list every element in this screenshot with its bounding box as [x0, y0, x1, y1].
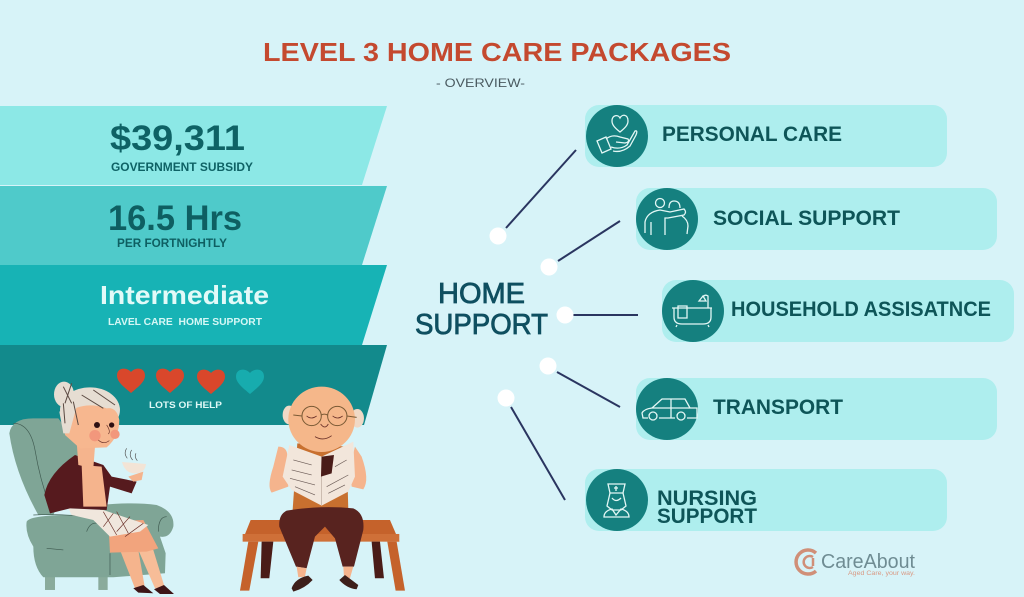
- icon: filled heart 1: [117, 369, 145, 393]
- panel: household assistance: [662, 280, 1014, 342]
- icon: two people: [636, 188, 698, 250]
- icon: bathtub: [662, 280, 724, 342]
- panel: hours band: PER FORTNIGHTLY: [117, 236, 227, 250]
- center label: home support: HOME: [438, 278, 525, 310]
- connector: social support: [540, 221, 620, 276]
- icon: filled heart 2: [156, 369, 184, 393]
- icon: empty teal heart: [236, 370, 264, 394]
- icon: car: [636, 378, 698, 440]
- panel: personal care: PERSONAL CARE: [662, 123, 842, 146]
- title: LEVEL 3 HOME CARE PACKAGES: [263, 37, 731, 67]
- logo: CareAbout: [796, 550, 915, 577]
- panel: help level band: [0, 345, 387, 425]
- panel: government subsidy band: [0, 106, 387, 185]
- illustration: woman in armchair: [9, 382, 174, 594]
- subtitle: - OVERVIEW-: [436, 76, 525, 90]
- center label: home support: SUPPORT: [415, 309, 548, 341]
- center label: home support: [415, 278, 548, 341]
- icon: filled heart 3: [197, 370, 225, 394]
- icon: hand holding heart: [586, 105, 648, 167]
- connector: transport: [540, 358, 620, 407]
- panel: transport: TRANSPORT: [713, 396, 843, 419]
- icon: logo mark: [796, 550, 816, 574]
- panel: hours band: [0, 186, 387, 265]
- panel: transport: [636, 378, 997, 440]
- panel: care level band: LAVEL CARE HOME SUPPORT: [108, 316, 263, 328]
- panel: social support: SOCIAL SUPPORT: [713, 207, 900, 230]
- panel: nursing support: [585, 469, 947, 531]
- panel: nursing support: NURSING: [657, 487, 757, 510]
- connector: personal care: [490, 150, 576, 244]
- logo: CareAbout: CareAbout: [821, 551, 915, 573]
- panel: help level band: LOTS OF HELP: [149, 400, 223, 411]
- connector: household assistance: [556, 306, 638, 324]
- logo: CareAbout: Aged Care, your way.: [848, 570, 915, 577]
- panel: personal care: [585, 105, 947, 167]
- panel: household assistance: HOUSEHOLD ASSISATNCE: [731, 298, 991, 321]
- panel: social support: [636, 188, 997, 250]
- connector: nursing support: [498, 390, 565, 500]
- panel: government subsidy band: $39,311: [110, 119, 245, 158]
- panel: care level band: [0, 265, 387, 345]
- icon: nurse: [586, 469, 648, 531]
- illustration: man reading on bench: [240, 387, 405, 592]
- panel: care level band: Intermediate: [100, 280, 269, 310]
- panel: hours band: 16.5 Hrs: [108, 199, 242, 238]
- panel: government subsidy band: GOVERNMENT SUBSIDY: [111, 160, 253, 174]
- panel: nursing support: SUPPORT: [657, 505, 757, 528]
